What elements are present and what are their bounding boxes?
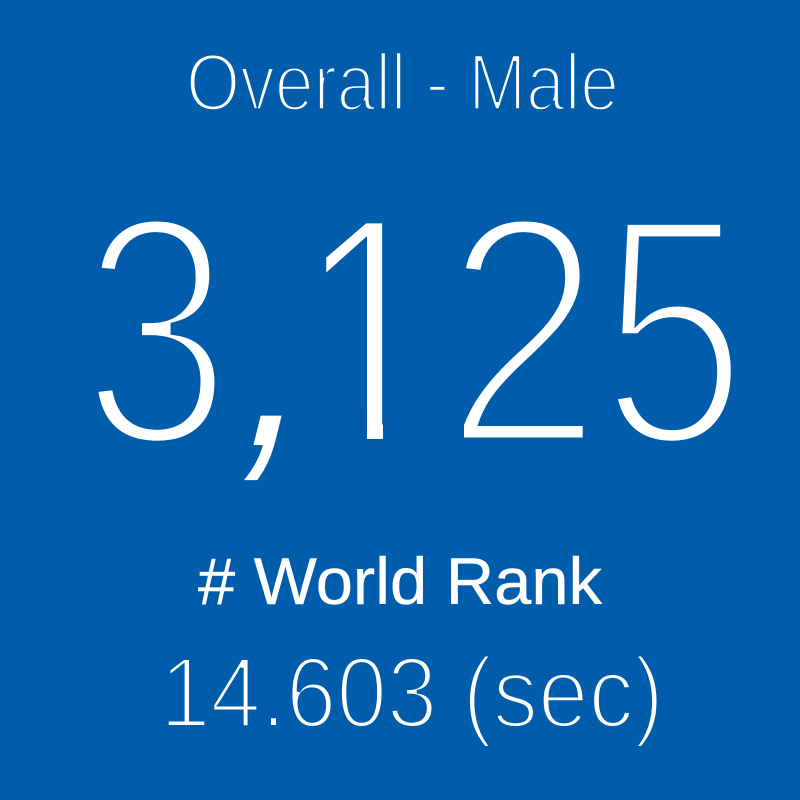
big rank number: 2 xyxy=(444,148,603,514)
big rank number: 5 xyxy=(601,147,747,514)
big rank number xyxy=(82,147,747,514)
time value: 14.603 (sec) xyxy=(160,637,664,749)
title: Overall - Male xyxy=(186,38,619,128)
metric label: # World Rank xyxy=(198,544,603,618)
big rank number: 1 xyxy=(297,147,443,514)
big rank number: , xyxy=(218,196,356,504)
big rank number: 3 xyxy=(82,147,232,514)
